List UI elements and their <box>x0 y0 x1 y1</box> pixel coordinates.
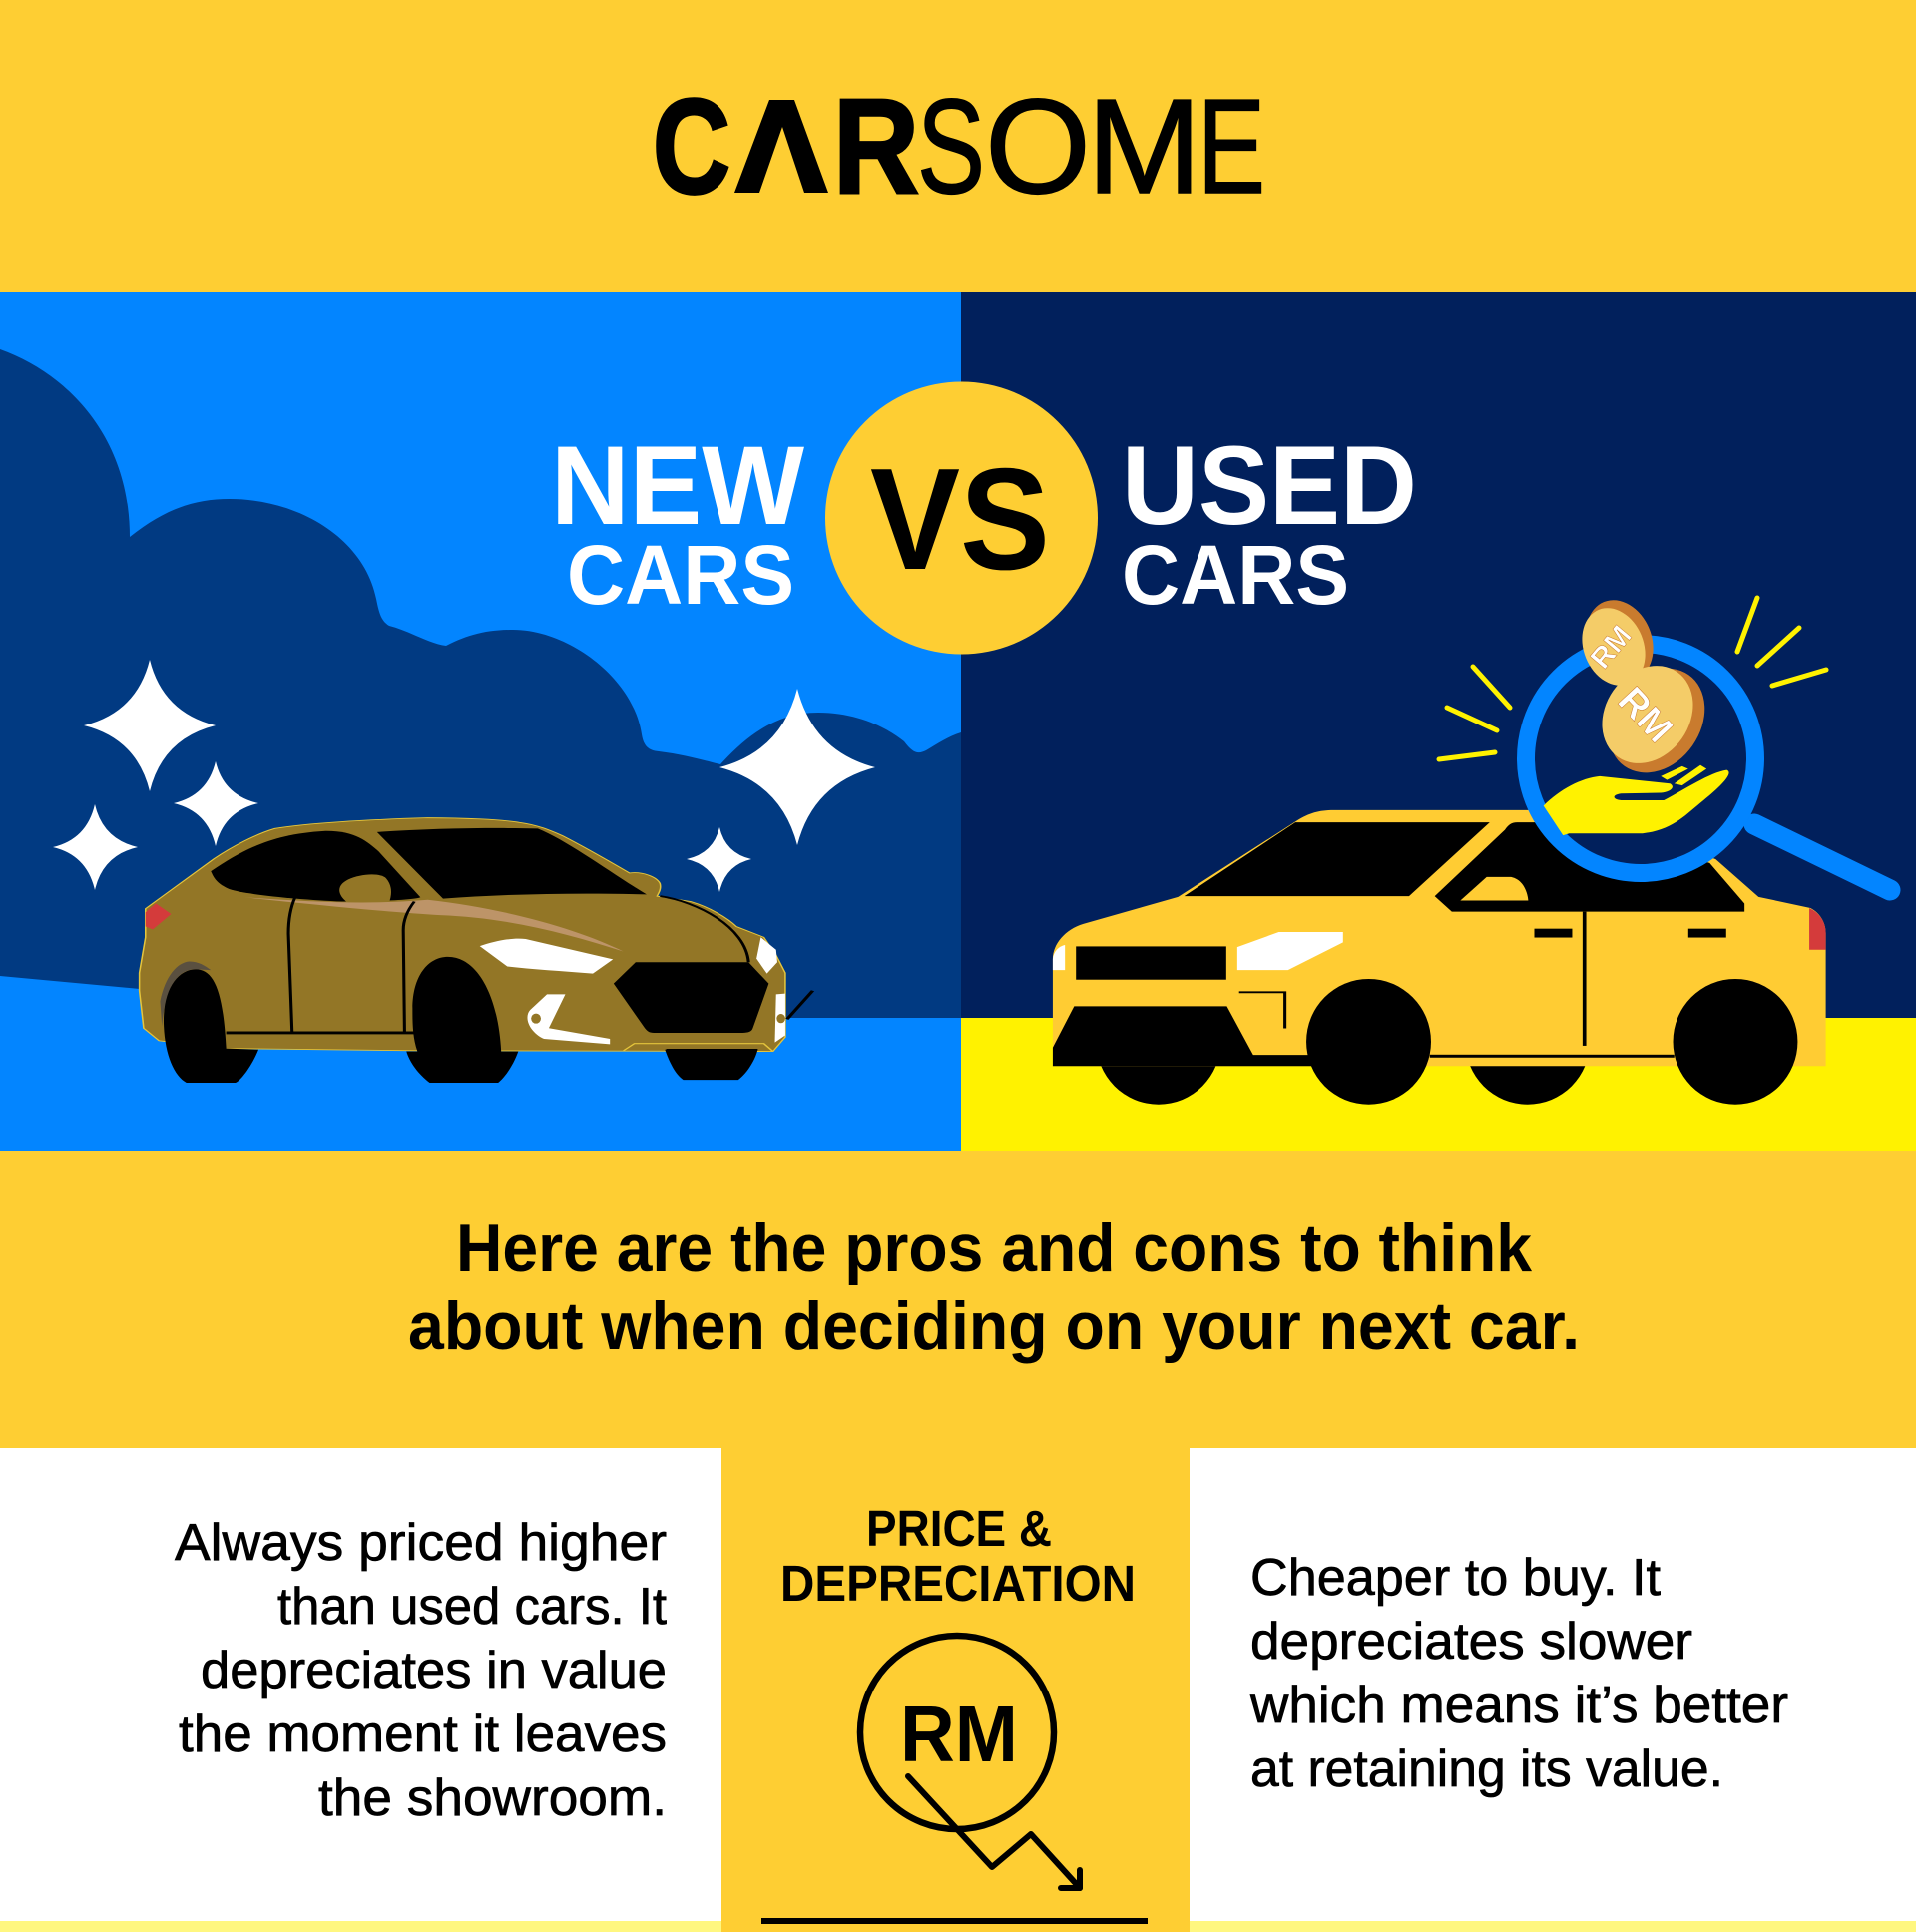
panel: new cars background <box>0 292 961 1151</box>
category title: PRICE & <box>866 1500 1052 1557</box>
new cars description: than used cars. It <box>277 1578 668 1636</box>
hand holding coins <box>1544 765 1729 835</box>
far-side wheels <box>1096 979 1590 1105</box>
new cars description: depreciates in value <box>201 1642 667 1699</box>
wheel arch <box>160 962 211 1027</box>
heading: USED CARS: CARS <box>1122 528 1349 622</box>
used cars description: Cheaper to buy. It <box>1250 1549 1662 1607</box>
category column <box>721 1448 1190 1932</box>
panel: used cars background <box>961 292 1916 1151</box>
side marker light <box>756 937 777 974</box>
new cars description: Always priced higher <box>175 1514 667 1572</box>
ground: used cars <box>961 1018 1916 1151</box>
front wheels <box>1306 979 1797 1105</box>
heading: USED CARS: USED <box>1122 423 1417 548</box>
category title <box>780 1500 1136 1612</box>
side light <box>1053 945 1065 970</box>
used cars description: which means it’s better <box>1249 1677 1788 1734</box>
intro text: about when deciding on your next car. <box>408 1288 1580 1364</box>
car body <box>1053 810 1826 1066</box>
logo: CARSOME: C <box>653 71 730 222</box>
icon: RM depreciation: RM <box>900 1690 1018 1778</box>
intro text <box>408 1210 1580 1364</box>
lens <box>1526 644 1755 873</box>
tail light <box>1809 908 1826 950</box>
coin: RM bottom: RM <box>1610 680 1680 751</box>
used cars description: depreciates slower <box>1250 1613 1692 1671</box>
logo: CARSOME: E <box>1198 71 1265 222</box>
door line and handles <box>1430 912 1726 1058</box>
bumper trim <box>624 1044 773 1052</box>
car: yellow used car <box>1053 810 1826 1105</box>
coin: RM top: RM <box>1585 620 1639 675</box>
bumper light <box>775 994 785 1043</box>
side window <box>211 831 420 902</box>
new cars description: the moment it leaves <box>179 1705 667 1763</box>
windscreen <box>377 828 647 899</box>
heading: NEW CARS: NEW <box>551 423 804 548</box>
windscreen <box>1185 822 1490 896</box>
logo: CARSOME: S <box>917 71 985 222</box>
side window <box>1435 822 1744 912</box>
logo: CARSOME: O <box>985 71 1091 222</box>
logo: CARSOME: A <box>733 71 830 222</box>
wheels <box>164 957 757 1083</box>
magnifying glass <box>1526 644 1890 890</box>
logo: CARSOME <box>653 71 1265 222</box>
headlight <box>480 939 613 974</box>
handle <box>1754 824 1890 890</box>
side mirror <box>1460 877 1528 901</box>
door lines and sill <box>227 896 812 1050</box>
next row edge <box>0 1921 1916 1932</box>
icon: RM depreciation <box>860 1636 1080 1888</box>
grille <box>1076 946 1226 980</box>
coin: RM bottom <box>1584 648 1724 791</box>
tail light <box>146 903 171 929</box>
side mirror <box>339 874 391 904</box>
new cars description: the showroom. <box>318 1769 667 1827</box>
grille <box>614 962 768 1033</box>
body crease <box>1239 992 1285 1029</box>
cloud backdrop <box>0 349 961 1018</box>
heading: NEW CARS <box>551 423 804 622</box>
car body <box>140 818 785 1052</box>
logo: CARSOME: M <box>1087 71 1201 222</box>
sparkles <box>53 660 875 892</box>
body highlight <box>244 897 624 952</box>
comparison row background <box>0 1448 1916 1921</box>
lower bumper <box>1053 1006 1312 1066</box>
fog light <box>527 994 610 1044</box>
category title: DEPRECIATION <box>780 1555 1136 1612</box>
intro text: Here are the pros and cons to think <box>456 1210 1532 1286</box>
used cars description: at retaining its value. <box>1250 1740 1723 1798</box>
spark lines <box>1439 598 1826 759</box>
headlight <box>1237 932 1343 970</box>
heading: NEW CARS: CARS <box>567 528 794 622</box>
VS badge <box>825 381 1098 655</box>
logo: CARSOME: R <box>833 71 919 222</box>
used cars description <box>1249 1549 1788 1798</box>
VS badge: VS <box>870 438 1050 600</box>
header band <box>0 0 1916 292</box>
intro band <box>0 1151 1916 1448</box>
new cars description <box>175 1514 668 1827</box>
coin: RM top <box>1571 590 1665 695</box>
car: gold new car <box>140 818 812 1083</box>
heading: USED CARS <box>1122 423 1417 622</box>
